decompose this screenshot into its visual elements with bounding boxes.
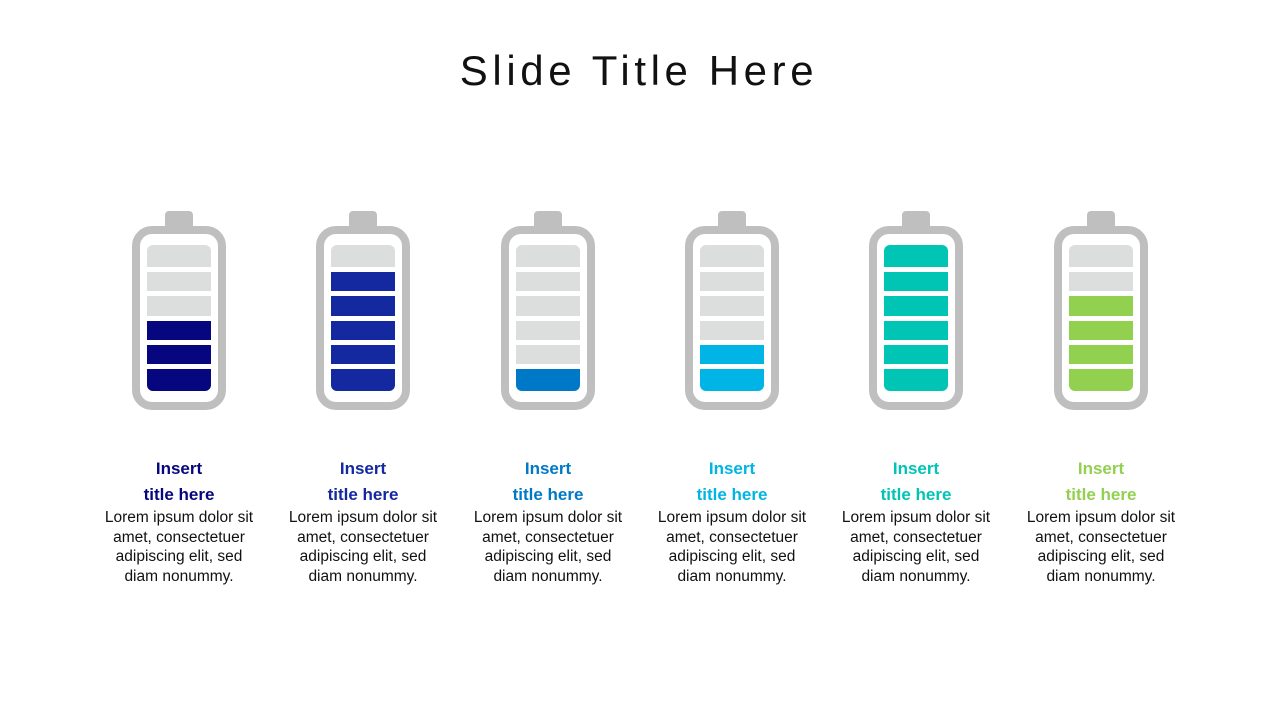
text block 1: Lorem ipsum dolor sit amet, consectetuer adipiscing elit, sed diam nonummy. [105,509,253,584]
battery 2 [320,211,406,406]
text block 6: title here [1066,485,1136,504]
text block 4: Insert [709,459,755,478]
battery 4 [689,211,775,406]
text block 1: Insert [156,459,202,478]
text block 2: Insert [340,459,386,478]
battery 3 [505,211,591,406]
text block 4: title here [697,485,767,504]
text block 6: Lorem ipsum dolor sit amet, consectetuer adipiscing elit, sed diam nonummy. [1027,509,1175,584]
text block 1 [105,459,253,584]
text block 5: title here [881,485,951,504]
text block 6: Insert [1078,459,1124,478]
text block 5: Lorem ipsum dolor sit amet, consectetuer adipiscing elit, sed diam nonummy. [842,509,990,584]
text block 5 [842,459,990,584]
text block 3 [474,459,622,584]
text block 4: Lorem ipsum dolor sit amet, consectetuer adipiscing elit, sed diam nonummy. [658,509,806,584]
text block 2 [289,459,437,584]
text block 3: Insert [525,459,571,478]
text block 2: Lorem ipsum dolor sit amet, consectetuer adipiscing elit, sed diam nonummy. [289,509,437,584]
text block 1: title here [144,485,214,504]
text block 3: Lorem ipsum dolor sit amet, consectetuer adipiscing elit, sed diam nonummy. [474,509,622,584]
text block 6 [1027,459,1175,584]
title: Slide Title Here [460,47,818,94]
battery 1 [136,211,222,406]
text block 3: title here [513,485,583,504]
text block 4 [658,459,806,584]
text block 2: title here [328,485,398,504]
text block 5: Insert [893,459,939,478]
battery 6 [1058,211,1144,406]
battery 5 [873,211,959,406]
